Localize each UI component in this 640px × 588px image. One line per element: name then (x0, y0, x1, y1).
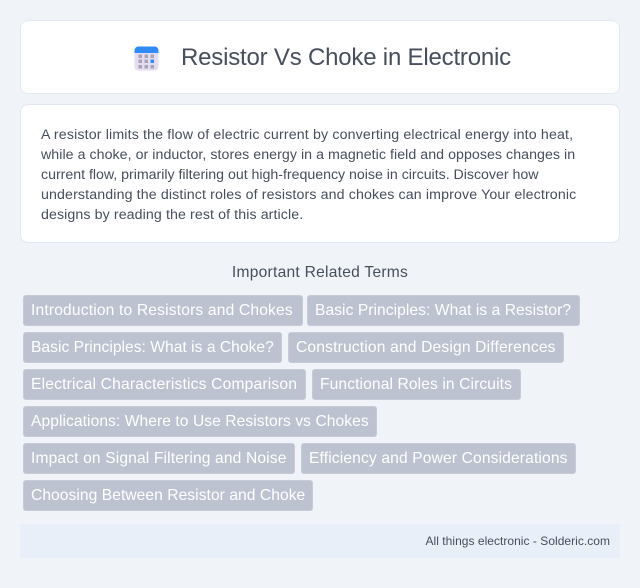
tag: Applications: Where to Use Resistors vs Chokes (31, 413, 369, 430)
related terms tags (23, 295, 580, 511)
tag: Choosing Between Resistor and Choke (31, 487, 305, 504)
tag (307, 295, 580, 326)
tag: Basic Principles: What is a Resistor? (315, 302, 571, 319)
tag: Introduction to Resistors and Chokes (31, 302, 293, 319)
title: Resistor Vs Choke in Electronic (181, 44, 511, 71)
tag (301, 443, 576, 474)
tag: Electrical Characteristics Comparison (31, 376, 297, 393)
intro paragraph: understanding the distinct roles of resistors and chokes can improve Your electronic (41, 187, 576, 203)
tag (23, 443, 295, 474)
tag (312, 369, 521, 400)
tag (288, 332, 564, 363)
intro text panel (20, 104, 620, 243)
intro paragraph: designs by reading the rest of this article. (41, 207, 303, 223)
section heading: Important Related Terms (232, 264, 408, 281)
intro paragraph (41, 127, 576, 223)
tag (23, 406, 377, 437)
footer bar (20, 524, 620, 558)
tag (23, 480, 313, 511)
tag: Construction and Design Differences (296, 339, 556, 356)
intro paragraph: A resistor limits the flow of electric current by converting electrical energy into heat, (41, 127, 573, 143)
icon: calendar (134, 46, 158, 70)
tag: Basic Principles: What is a Choke? (31, 339, 274, 356)
tag: Functional Roles in Circuits (320, 376, 512, 393)
tag (23, 332, 282, 363)
tag: Efficiency and Power Considerations (309, 450, 568, 467)
footer text: All things electronic - Solderic.com (426, 534, 610, 548)
header panel (20, 20, 620, 94)
tag (23, 369, 306, 400)
tag: Impact on Signal Filtering and Noise (31, 450, 287, 467)
tag (23, 295, 303, 326)
intro paragraph: current flow, primarily filtering out high-frequency noise in circuits. Discover how (41, 167, 538, 183)
intro paragraph: while a choke, or inductor, stores energy in a magnetic field and opposes changes in (41, 147, 575, 163)
